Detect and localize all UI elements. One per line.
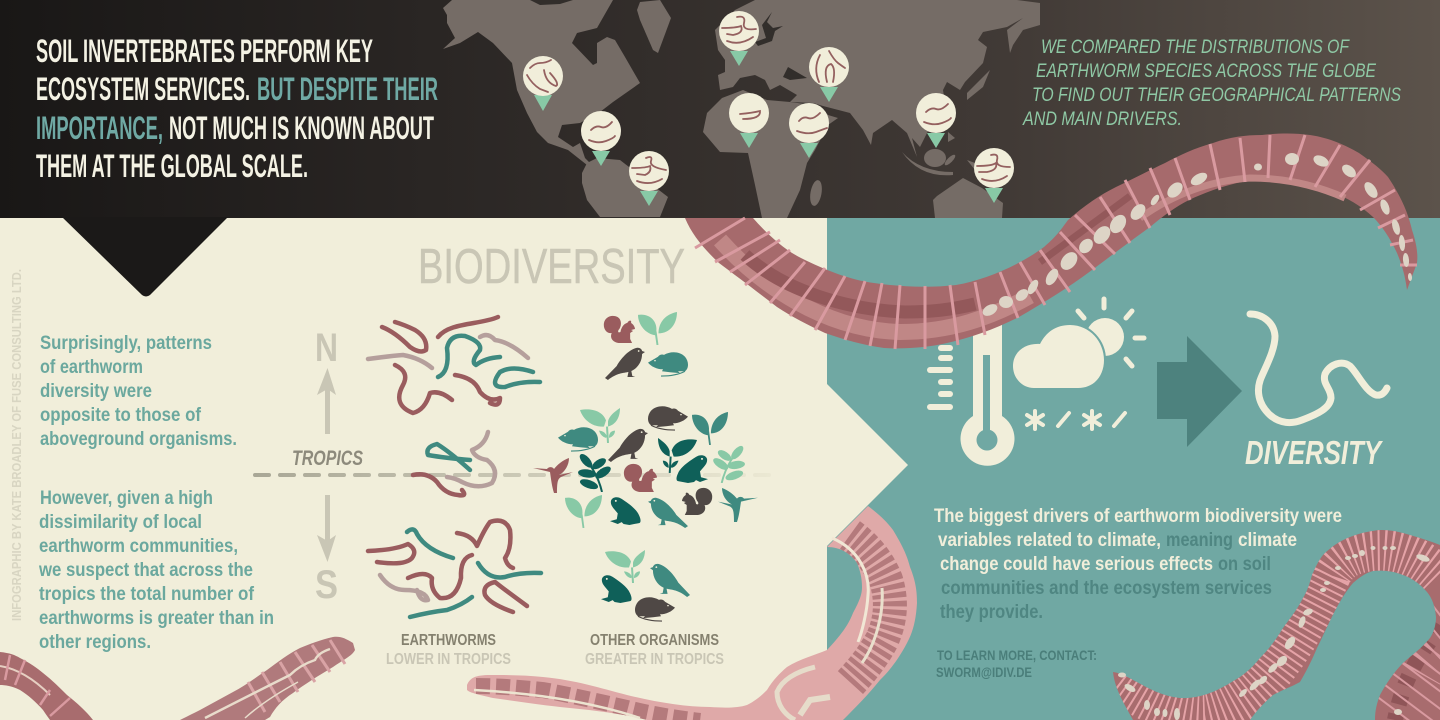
earthworm group: tropics xyxy=(413,432,495,495)
text block: drivers: The biggest drivers of earthworm biodiversity were xyxy=(934,506,1342,527)
text block: surprising patterns: diversity were xyxy=(40,381,152,402)
pin: West Africa xyxy=(729,93,769,148)
text block: dissimilarity: earthworms is greater than in xyxy=(39,608,274,629)
text block: dissimilarity xyxy=(38,488,274,653)
lower-left earthworm (end) xyxy=(0,652,93,720)
world map xyxy=(443,0,1040,218)
text block: surprising patterns xyxy=(40,333,237,450)
organisms: north group xyxy=(604,312,688,380)
icon: weather cloud, sun and snow xyxy=(1013,299,1144,429)
equator dashed line xyxy=(255,473,770,477)
pin: Europe xyxy=(719,11,759,66)
pink earthworm xyxy=(467,506,917,720)
intro text: AND MAIN DRIVERS. xyxy=(1022,108,1182,130)
text block: drivers xyxy=(934,506,1342,623)
text block: surprising patterns: aboveground organisms. xyxy=(40,429,237,450)
text block: drivers: meaning xyxy=(1166,530,1233,551)
label: N: N xyxy=(315,326,338,370)
caption: other organisms xyxy=(585,632,724,668)
text block: dissimilarity: we suspect that across the xyxy=(38,560,253,581)
intro text xyxy=(1022,36,1401,130)
icon: thermometer xyxy=(927,320,1014,466)
pin: Central America xyxy=(581,111,621,166)
label: tropics: TROPICS xyxy=(292,447,363,470)
icon: cream earthworm xyxy=(1250,314,1387,423)
title heading: SOIL INVERTEBRATES PERFORM KEY xyxy=(36,33,373,69)
caption: other organisms: OTHER ORGANISMS xyxy=(590,632,719,649)
text block: drivers: they provide. xyxy=(940,602,1043,623)
pin: South America xyxy=(629,151,669,206)
text block: surprising patterns: opposite to those of xyxy=(40,405,202,426)
organisms: tropics group xyxy=(533,406,758,528)
pin: North America xyxy=(523,56,563,111)
caption: other organisms: GREATER IN TROPICS xyxy=(585,651,724,668)
title heading: IMPORTANCE, xyxy=(36,110,163,146)
earthworm group: north xyxy=(368,317,540,413)
pin: Australia xyxy=(974,148,1014,203)
lower-right earthworm xyxy=(1113,530,1440,720)
black pointer triangle xyxy=(62,217,228,296)
title heading: THEM AT THE GLOBAL SCALE. xyxy=(36,148,308,184)
pin: East Africa xyxy=(789,103,829,158)
text block: drivers: communities and the ecosystem services xyxy=(941,578,1272,599)
text block: dissimilarity: other regions. xyxy=(39,632,151,653)
text block: dissimilarity: tropics the total number of xyxy=(39,584,255,605)
contact xyxy=(936,648,1097,680)
arrow: climate to diversity xyxy=(1157,336,1242,447)
arrow: south xyxy=(317,495,336,562)
text block: drivers: change could have serious effects xyxy=(940,554,1213,575)
pin: South-East Asia xyxy=(916,93,956,148)
text block: surprising patterns: of earthworm xyxy=(40,357,143,378)
label: diversity: DIVERSITY xyxy=(1245,434,1383,471)
top band xyxy=(0,0,1440,218)
background: teal panel xyxy=(827,218,1440,720)
map: inland seas xyxy=(530,0,807,80)
caption: earthworms: EARTHWORMS xyxy=(401,632,496,649)
contact: TO LEARN MORE, CONTACT: xyxy=(937,648,1097,663)
caption: earthworms xyxy=(386,632,511,668)
text block: drivers: variables related to climate, xyxy=(938,530,1161,551)
title heading: BUT DESPITE THEIR xyxy=(257,71,438,107)
text block: drivers: on soil xyxy=(1218,554,1271,575)
title heading: NOT MUCH IS KNOWN ABOUT xyxy=(169,110,434,146)
panel: biodiversity cream arrow xyxy=(0,218,908,720)
label: S: S xyxy=(315,563,338,607)
pin: Central Asia xyxy=(809,47,849,102)
arrow: north xyxy=(317,368,336,434)
text block: dissimilarity: dissimilarity of local xyxy=(39,512,202,533)
intro text: WE COMPARED THE DISTRIBUTIONS OF xyxy=(1041,36,1350,58)
text block: surprising patterns: Surprisingly, patterns xyxy=(40,333,212,354)
lower-left earthworm (head) xyxy=(180,637,355,720)
text block: dissimilarity: earthworm communities, xyxy=(39,536,238,557)
big earthworm xyxy=(685,134,1417,349)
heading: biodiversity: BIODIVERSITY xyxy=(418,240,685,294)
organisms: south group xyxy=(601,550,690,621)
caption: earthworms: LOWER IN TROPICS xyxy=(386,651,511,668)
credit: INFOGRAPHIC BY KATE BROADLEY OF FUSE CONSULTING LTD. xyxy=(9,269,24,621)
text block: dissimilarity: However, given a high xyxy=(40,488,213,509)
contact: SWORM@IDIV.DE xyxy=(936,665,1032,680)
title heading xyxy=(36,33,438,184)
text block: drivers: climate xyxy=(1238,530,1297,551)
title heading: ECOSYSTEM SERVICES. xyxy=(36,71,250,107)
earthworm group: south xyxy=(368,521,541,617)
